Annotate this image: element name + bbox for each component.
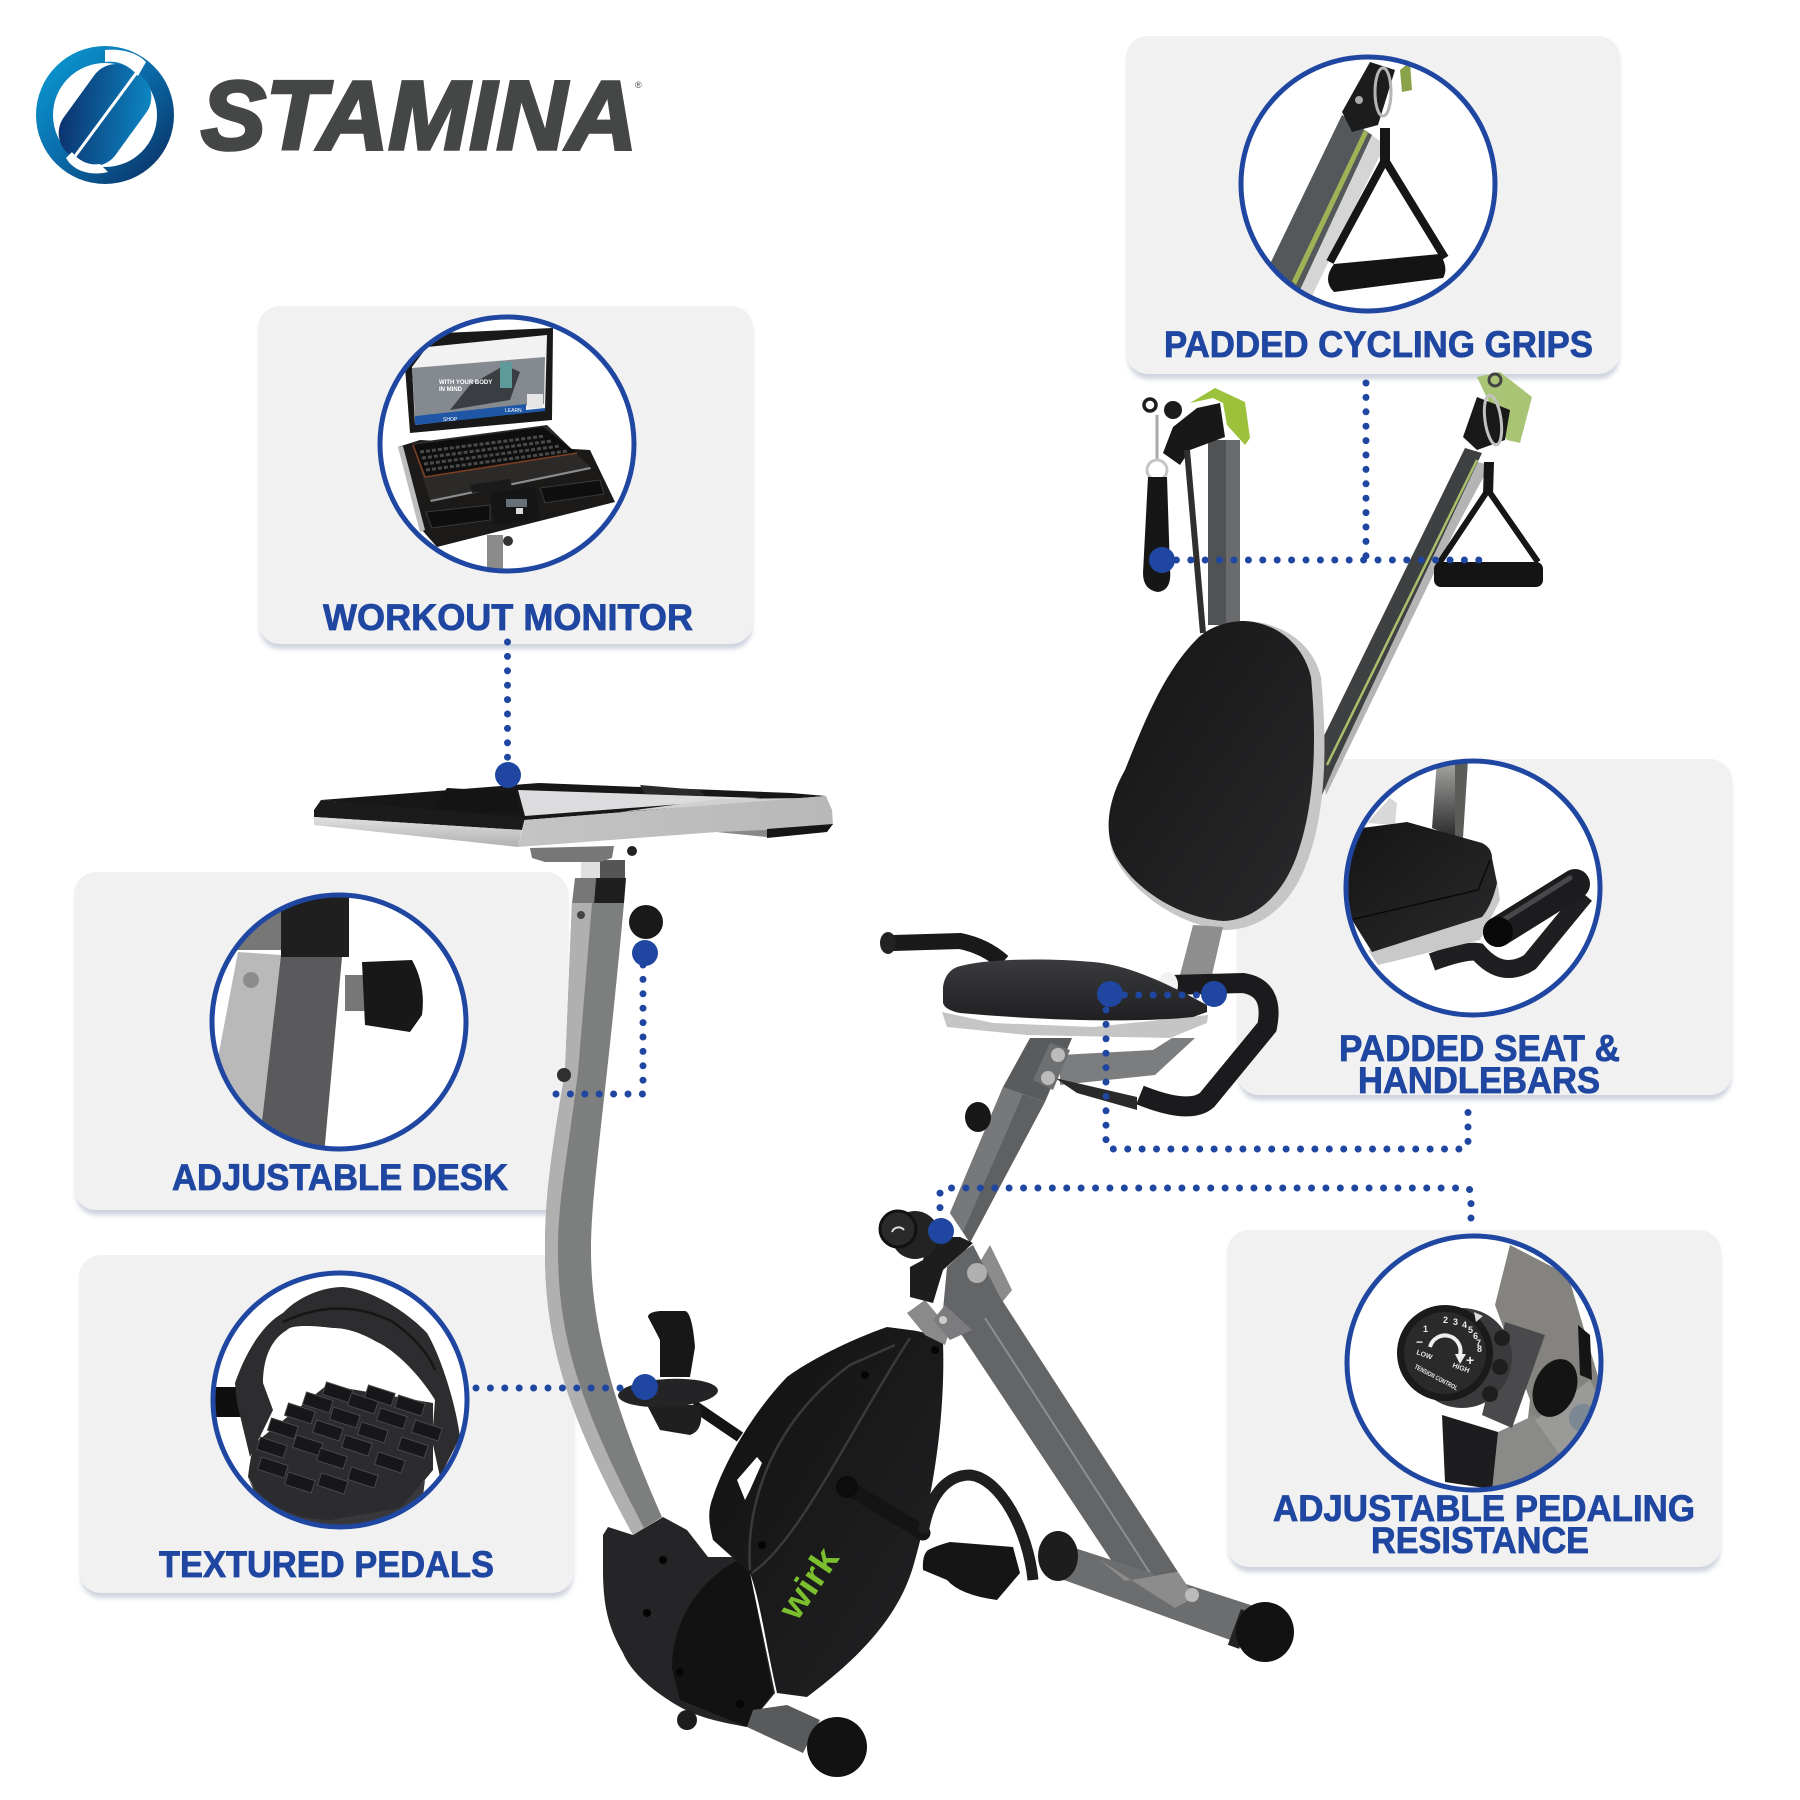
connector: workout monitor <box>495 642 521 788</box>
front frame tube <box>907 1237 1178 1581</box>
flywheel housing: wirk <box>769 1539 847 1627</box>
label: PADDED CYCLING GRIPS <box>1164 324 1593 365</box>
label: HANDLEBARS <box>1358 1060 1600 1101</box>
logo wordmark: STAMINA <box>201 61 637 170</box>
seat support tube <box>1180 925 1223 975</box>
connector: adjustable pedaling resistance <box>928 1188 1471 1244</box>
inset photo: resistance dial: HIGH <box>1451 1362 1470 1375</box>
desk post curved tube <box>545 903 662 1535</box>
panel: textured pedals <box>79 1255 574 1598</box>
connector: padded seat and handlebars <box>1097 981 1468 1149</box>
inset photo: laptop on desk: SHOP <box>443 417 458 423</box>
panel: adjustable pedaling resistance <box>1227 1230 1721 1572</box>
label: ADJUSTABLE DESK <box>172 1157 508 1198</box>
inset photo: resistance dial: 1 <box>1423 1324 1428 1334</box>
inset photo: desk knob <box>200 890 466 1155</box>
panel: workout monitor <box>258 306 753 649</box>
label <box>1339 1028 1620 1101</box>
front pedal with strap <box>923 1475 1033 1600</box>
panel card <box>79 1255 574 1598</box>
flywheel housing <box>603 1327 943 1727</box>
desk adjustment knob <box>629 905 663 939</box>
label: WORKOUT MONITOR <box>323 597 693 638</box>
desk tray <box>314 783 833 862</box>
label: PADDED SEAT & <box>1339 1028 1620 1069</box>
connector: padded cycling grips <box>1149 383 1485 573</box>
inset photo: laptop on desk: LEARN <box>505 408 522 414</box>
inset photo: resistance dial: − <box>1416 1335 1423 1349</box>
rear handlebar <box>880 932 1003 962</box>
inset photo: resistance dial: 7 <box>1476 1338 1481 1348</box>
panel card <box>1126 36 1620 379</box>
inset photo: resistance dial <box>1347 1236 1605 1490</box>
backrest pad <box>1109 621 1324 930</box>
inset photo: seat and handlebar <box>1340 760 1600 1015</box>
inset photo: resistance dial: LOW <box>1415 1349 1433 1362</box>
inset photo: resistance dial: + <box>1466 1352 1474 1368</box>
label: RESISTANCE <box>1371 1520 1589 1561</box>
registered mark: ® <box>635 80 642 90</box>
panel: adjustable desk <box>74 872 568 1215</box>
inset photo: laptop on desk: IN MIND <box>439 387 463 393</box>
connector: adjustable desk <box>556 940 658 1094</box>
panel: padded cycling grips <box>1126 36 1620 379</box>
front stabilizer <box>1038 1531 1294 1662</box>
inset photo: cycling grip <box>1241 57 1495 311</box>
diagonal arm with hanging handle <box>1319 372 1543 795</box>
desk post top sleeve <box>572 860 626 903</box>
front crank arm <box>836 1476 923 1533</box>
connector: textured pedals <box>476 1374 658 1400</box>
product photo: Wirk exercise bike <box>314 372 1543 1777</box>
handlebar end cap <box>1158 972 1178 998</box>
vertical rear arm with pulley and strap <box>1143 388 1250 633</box>
inset photo: resistance dial: TENSION CONTROL <box>1413 1364 1459 1392</box>
inset photo: pedal <box>213 1273 467 1530</box>
label: TEXTURED PEDALS <box>159 1544 494 1585</box>
front handlebar <box>1140 983 1269 1106</box>
label: ADJUSTABLE PEDALING <box>1273 1488 1695 1529</box>
upright seat tube <box>950 1038 1072 1243</box>
inset photo: resistance dial: 5 <box>1468 1325 1473 1335</box>
seat cushion <box>942 959 1208 1038</box>
inset photo: resistance dial: 8 <box>1477 1344 1482 1354</box>
inset photo: resistance dial: 6 <box>1473 1331 1478 1341</box>
panel: padded seat and handlebars <box>1237 759 1732 1101</box>
panel card <box>1227 1230 1721 1572</box>
inset photo: resistance dial: 4 <box>1462 1320 1467 1330</box>
inset photo: resistance dial: 3 <box>1453 1317 1458 1327</box>
logo: Stamina <box>36 46 642 184</box>
inset photo: resistance dial: 2 <box>1443 1315 1448 1325</box>
panel card <box>258 306 753 649</box>
inset photo: laptop on desk <box>380 317 634 575</box>
icon: Stamina emblem <box>36 46 174 184</box>
resistance knob <box>880 1211 939 1259</box>
inset photo: laptop on desk: WITH YOUR BODY <box>439 380 492 386</box>
panel card <box>1237 759 1732 1100</box>
rear stabilizer foot <box>677 1705 867 1777</box>
seat frame bracket <box>1055 1038 1195 1110</box>
label <box>1273 1488 1695 1561</box>
back pedal with strap <box>617 1311 740 1437</box>
panel card <box>74 872 568 1215</box>
